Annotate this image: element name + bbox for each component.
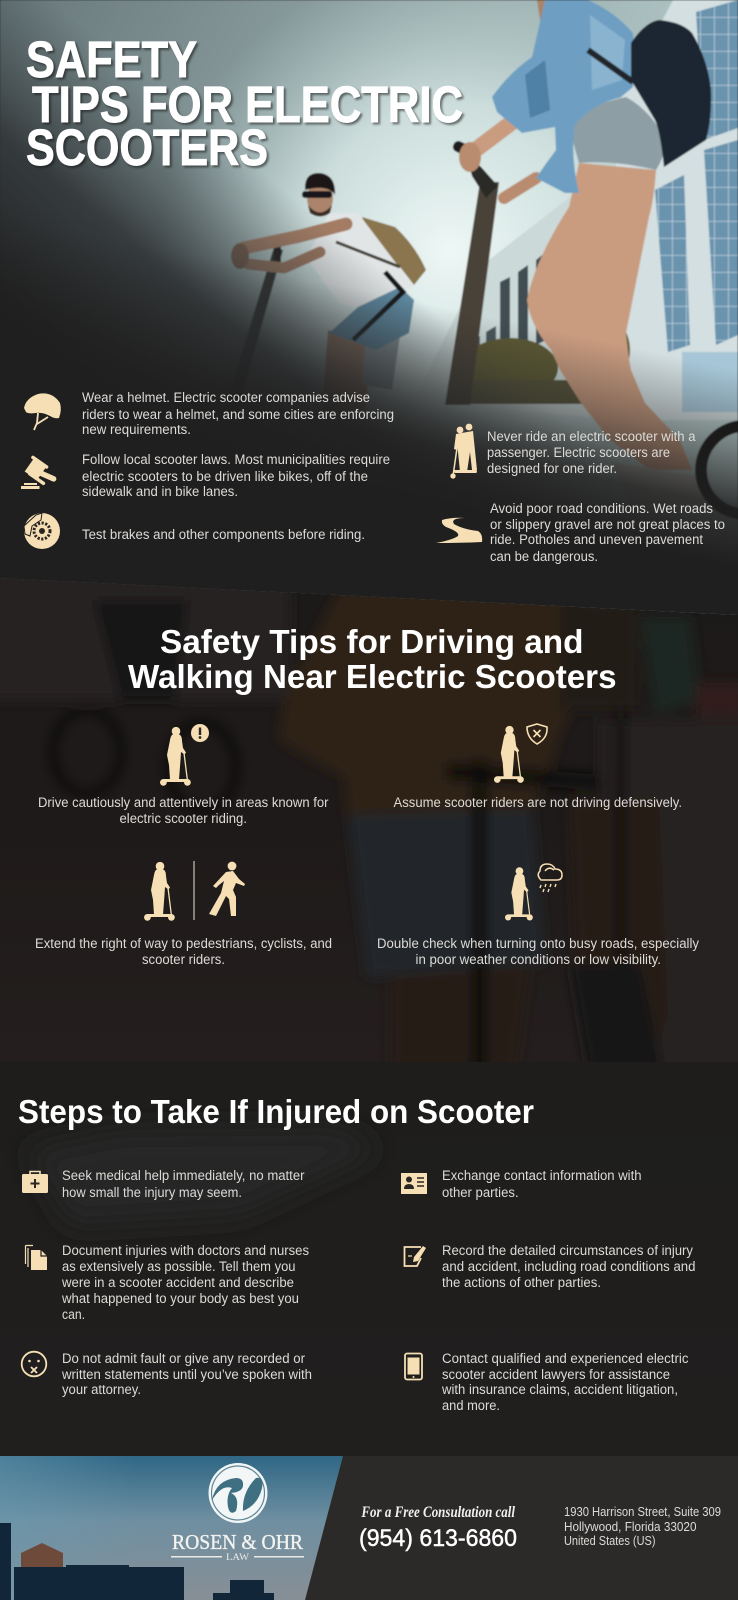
step: contact qualified lawyers: Contact qualified and experienced electric (442, 1351, 689, 1366)
icon: gavel (21, 455, 57, 489)
tip: road conditions (436, 501, 725, 564)
woman's arm and hand (459, 120, 515, 172)
step: document injuries: what happened to your body as best you (61, 1291, 299, 1306)
heading: steps to take: Steps to Take If Injured on Scooter (18, 1093, 534, 1130)
backpack (588, 20, 711, 167)
man's legs (325, 330, 400, 403)
panel: driving and walking tips (35, 623, 699, 967)
logo: Rosen & Ohr Law: LAW (226, 1552, 250, 1562)
address (564, 1505, 721, 1548)
address: 1930 Harrison Street, Suite 309 (564, 1505, 721, 1519)
man's head (302, 173, 335, 216)
hero photo: two riders on scooters (0, 0, 738, 620)
panel: steps to take if injured (0, 1062, 738, 1456)
tip: drive cautiously (38, 724, 329, 826)
step: contact qualified lawyers (405, 1351, 689, 1413)
right building (616, 0, 738, 420)
step: seek medical help: how small the injury may seem. (62, 1185, 242, 1200)
icon: id card (401, 1173, 427, 1194)
hero title: SAFETY (26, 31, 197, 88)
tip: no passengers: designed for one rider. (487, 461, 617, 476)
woman's legs (526, 162, 692, 471)
hero title: TIPS FOR ELECTRIC (32, 76, 463, 133)
step: record the circumstances: and accident, including road conditions and (442, 1259, 696, 1274)
step: exchange contact information (401, 1168, 642, 1200)
step: contact qualified lawyers: and more. (442, 1398, 500, 1413)
lower curved building (440, 199, 570, 356)
step: do not admit fault: Do not admit fault or give any recorded or (62, 1351, 305, 1366)
address: United States (US) (564, 1534, 656, 1548)
heading: safety tips for driving and walking: Safety Tips for Driving and (160, 623, 584, 660)
icon: rider with shield (494, 724, 547, 783)
tip: assume riders not defensive (394, 724, 682, 810)
tip: follow local laws: electric scooters to be driven like bikes, off of the (82, 469, 368, 484)
tip: no passengers (450, 424, 696, 479)
icon: rider with alert (160, 724, 209, 786)
woman's shorts (565, 97, 666, 170)
address: Hollywood, Florida 33020 (564, 1520, 697, 1534)
logo: Rosen & Ohr Law: ROSEN & OHR (172, 1530, 303, 1554)
hero title (26, 40, 466, 170)
step: document injuries: were in a scooter accident and describe (61, 1275, 294, 1290)
tip: extend the right of way: scooter riders. (142, 952, 225, 967)
man's arms (231, 224, 346, 269)
tip: wear a helmet (24, 390, 394, 437)
step: document injuries: Document injuries with doctors and nurses (62, 1243, 309, 1258)
woman's scooter (445, 139, 499, 405)
icon: documents (26, 1246, 47, 1270)
tip: drive cautiously: Drive cautiously and attentively in areas known for (38, 795, 329, 810)
step: do not admit fault: your attorney. (62, 1382, 141, 1397)
woman's second arm (504, 178, 536, 198)
man's denim shorts (329, 272, 414, 350)
call to action (359, 1504, 517, 1552)
tip: wear a helmet: new requirements. (82, 422, 191, 437)
step: document injuries: as extensively as possible. Tell them you (62, 1259, 296, 1274)
icon: smartphone (405, 1354, 422, 1380)
tip: test brakes: Test brakes and other components before riding. (82, 527, 365, 542)
tip: road conditions: ride. Potholes and uneven pavement (490, 532, 703, 547)
call to action: (954) 613-6860 (359, 1525, 517, 1552)
woman's denim jacket (492, 0, 634, 193)
tip: follow local laws: Follow local scooter laws. Most municipalities require (82, 452, 390, 467)
tip: test brakes (24, 513, 365, 549)
tip: no passengers: passenger. Electric scooters are (487, 445, 670, 460)
tip: double check when turning: in poor weather conditions or low visibility. (416, 952, 661, 967)
icon: rider and pedestrian (144, 861, 245, 921)
footer city photo (0, 1456, 345, 1600)
panel: driving and walking background photo (45, 595, 738, 1062)
icon: winding road (436, 518, 482, 543)
tip: wear a helmet: riders to wear a helmet, and some cities are enforcing (82, 407, 394, 422)
icon: brake disc (24, 513, 60, 549)
heading: safety tips for driving and walking (128, 623, 616, 695)
icon: note and pen (404, 1246, 426, 1266)
tip: assume riders not defensive: Assume scooter riders are not driving defensively. (394, 795, 682, 810)
wheel at right (701, 426, 738, 514)
step: exchange contact information: other parties. (442, 1185, 519, 1200)
man's white t-shirt (306, 213, 414, 310)
icon: helmet (24, 393, 61, 430)
tip: double check when turning: Double check when turning onto busy roads, especially (377, 936, 699, 951)
tip: double check when turning (377, 864, 699, 967)
tip: wear a helmet: Wear a helmet. Electric scooter companies advise (82, 390, 370, 405)
step: do not admit fault: written statements until you’ve spoken with (61, 1367, 312, 1382)
tip: road conditions: Avoid poor road conditions. Wet roads (490, 501, 713, 516)
step: record the circumstances (404, 1243, 696, 1290)
heading: safety tips for driving and walking: Walking Near Electric Scooters (128, 658, 616, 695)
step: record the circumstances: Record the detailed circumstances of injury (442, 1243, 693, 1258)
icon: injured face (22, 1352, 46, 1376)
step: seek medical help (22, 1168, 305, 1200)
step: exchange contact information: Exchange contact information with (442, 1168, 642, 1183)
icon: medical kit (22, 1172, 48, 1193)
panel: footer (0, 1456, 738, 1600)
hero title: SCOOTERS (26, 119, 268, 176)
tree (470, 332, 631, 405)
man's backpack (362, 217, 426, 285)
man's scooter (248, 246, 284, 345)
tip: road conditions: or slippery gravel are not great places to (490, 517, 725, 532)
icon: two riders (450, 424, 477, 479)
panel: hero (0, 0, 738, 620)
tip: follow local laws (21, 454, 390, 496)
tip: extend the right of way: Extend the right of way to pedestrians, cyclists, and (35, 936, 332, 951)
step: contact qualified lawyers: with insurance claims, accident litigation, (441, 1382, 678, 1397)
tip: drive cautiously: electric scooter riding. (120, 811, 247, 826)
tip: follow local laws: sidewalk and in bike lanes. (82, 484, 238, 499)
logo: Rosen & Ohr Law (171, 1463, 304, 1562)
tip: no passengers: Never ride an electric scooter with a (487, 429, 696, 444)
step: do not admit fault (22, 1351, 312, 1397)
call to action: For a Free Consultation call (361, 1504, 515, 1521)
tip: road conditions: can be dangerous. (490, 549, 598, 564)
tip: extend the right of way (35, 861, 332, 967)
step: contact qualified lawyers: scooter accident lawyers for assistance (442, 1367, 670, 1382)
icon: rider with rain cloud (505, 864, 562, 920)
step: document injuries (26, 1243, 309, 1322)
step: seek medical help: Seek medical help immediately, no matter (62, 1168, 305, 1183)
woman's face (536, 0, 546, 20)
step: record the circumstances: the actions of other parties. (442, 1275, 601, 1290)
step: document injuries: can. (62, 1307, 85, 1322)
